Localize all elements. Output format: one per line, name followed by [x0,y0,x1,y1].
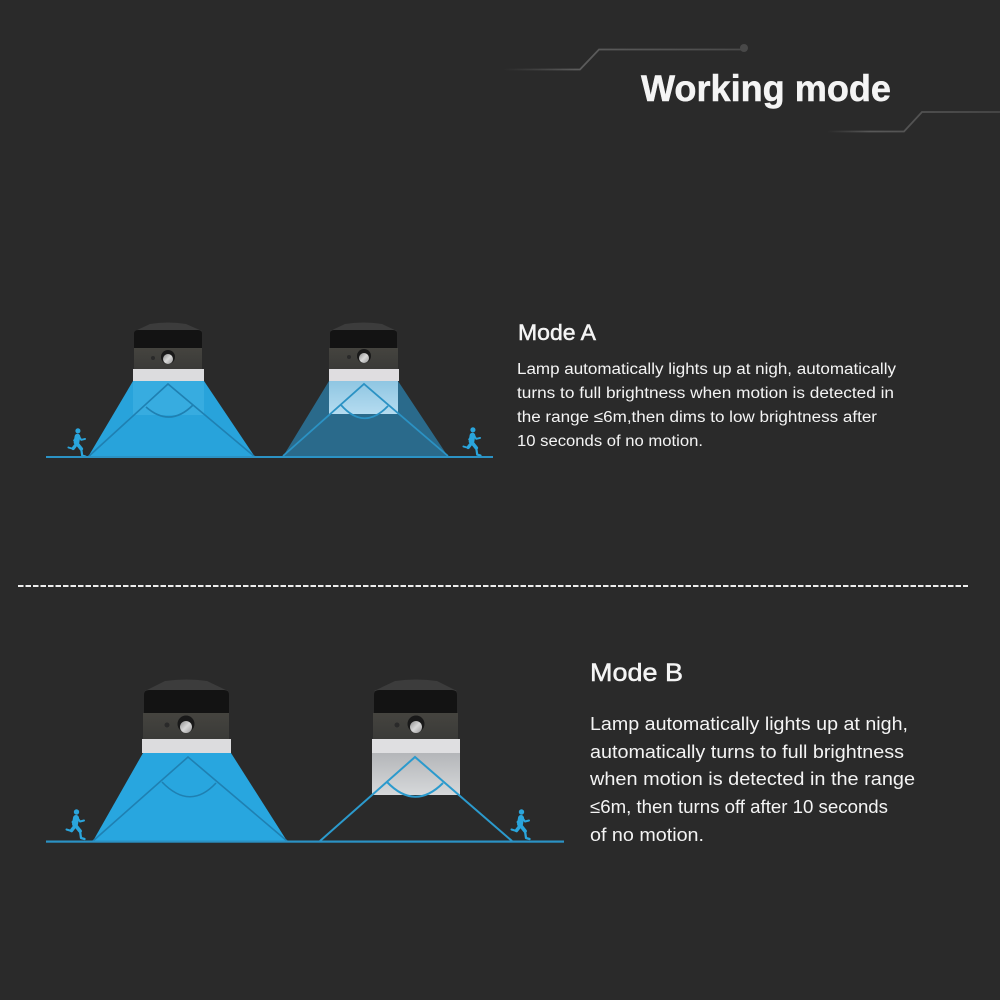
sensor range lines [93,757,287,841]
text block: Mode B description: automatically turns to full brightness [590,741,904,762]
text block: Mode B description [589,713,915,845]
running person [512,809,530,839]
light cone [93,753,287,841]
heading: Mode A: Mode A [518,320,596,345]
lit diffuser [329,381,398,414]
dashed divider [18,585,968,587]
running person [68,428,86,456]
panel: mode A [46,320,896,458]
mode B diagram: off [320,680,530,841]
text block: Mode A description: turns to full brightness when motion is detected in [517,385,894,402]
lamp [133,322,204,381]
sensor range lines [88,384,255,457]
sensor range lines [283,384,448,456]
running person [463,427,481,456]
heading: Mode B: Mode B [590,659,683,687]
decorative circuit line: right [827,112,1000,132]
text block: Mode A description: the range ≤6m,then dims to low brightness after [517,409,877,426]
title: Working mode [641,68,891,109]
ground line A [46,456,493,458]
mode B diagram: full brightness [66,680,287,841]
text block: Mode B description: when motion is detected in the range [589,768,915,789]
dim light cone [283,381,448,456]
running person [66,809,84,839]
text block: Mode B description: of no motion. [590,824,704,845]
lamp [329,322,399,381]
panel: mode B [46,659,915,845]
lamp [142,680,231,753]
decorative circuit line: top [503,44,748,70]
text block: Mode A description: 10 seconds of no motion. [517,433,703,450]
unlit diffuser [372,753,460,795]
sensor range lines [320,757,512,841]
lamp diffuser [133,381,204,415]
mode A diagram: full brightness [68,322,255,457]
lamp [372,680,460,753]
text block: Mode B description: Lamp automatically lights up at nigh, [590,713,908,734]
text block: Mode A description [517,361,896,450]
mode A diagram: dimmed [283,322,481,456]
ground line B [46,840,564,843]
text block: Mode A description: Lamp automatically lights up at nigh, automatically [517,361,896,378]
text block: Mode B description: ≤6m, then turns off after 10 seconds [590,796,888,817]
light cone [88,381,255,457]
